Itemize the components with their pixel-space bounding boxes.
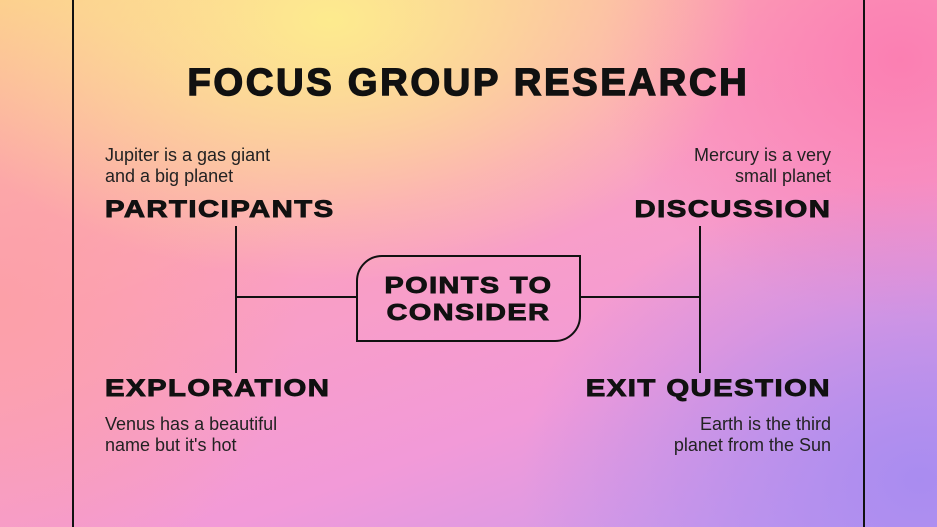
text: participants [105, 145, 270, 186]
center box [356, 255, 581, 342]
title: FOCUS GROUP RESEARCH [187, 62, 750, 104]
heading: participants: PARTICIPANTS [105, 196, 335, 223]
text: discussion [694, 145, 831, 186]
text: exit question: planet from the Sun [674, 435, 831, 455]
heading: exit question: EXIT QUESTION [586, 375, 831, 402]
text: exit question [674, 414, 831, 455]
connector right [581, 226, 701, 373]
center box: CONSIDER [387, 299, 550, 325]
connector left [235, 226, 356, 373]
text: exploration: name but it's hot [105, 435, 237, 455]
center box: POINTS TO [385, 272, 552, 298]
text: participants: and a big planet [105, 166, 233, 186]
text: discussion: small planet [735, 166, 831, 186]
text: exit question: Earth is the third [700, 414, 831, 434]
text: discussion: Mercury is a very [694, 145, 831, 165]
heading: exploration: EXPLORATION [105, 375, 330, 402]
heading: discussion: DISCUSSION [634, 196, 831, 223]
text: exploration: Venus has a beautiful [105, 414, 277, 434]
text: participants: Jupiter is a gas giant [105, 145, 270, 165]
text: exploration [105, 414, 277, 455]
